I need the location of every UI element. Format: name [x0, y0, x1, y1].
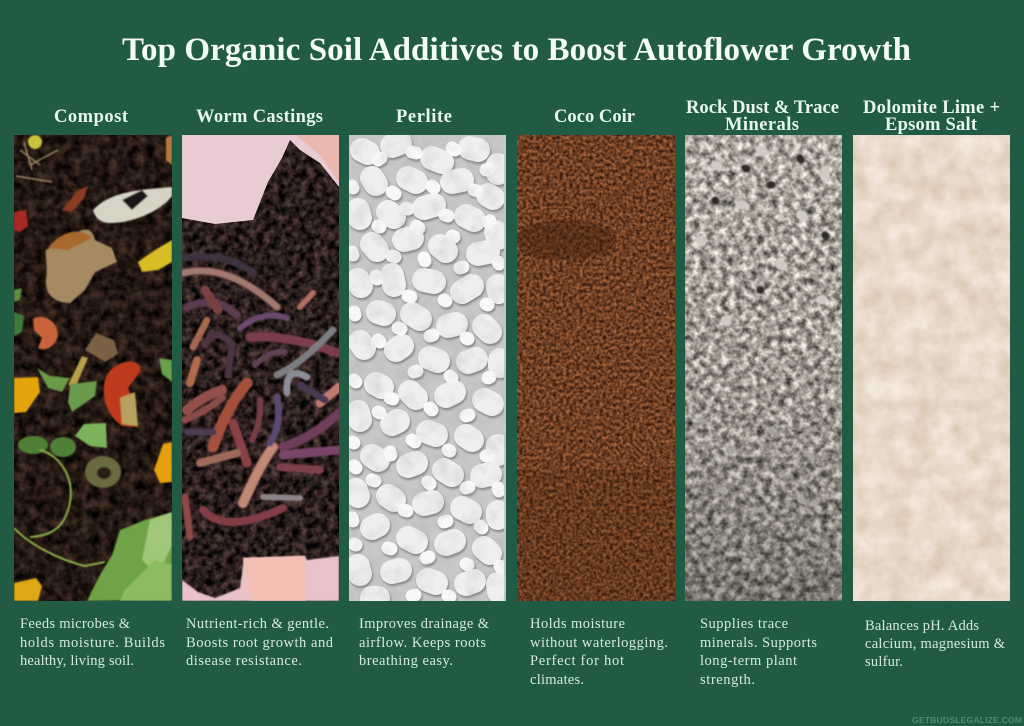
column: compost [14, 107, 172, 669]
heading: rock dust and trace minerals: Minerals [725, 115, 799, 135]
heading: dolomite lime and epsom salt [863, 98, 1000, 135]
photo: crushed rock dust [685, 135, 842, 601]
photo: worms in a hand [182, 135, 339, 601]
description: worm castings [186, 616, 334, 669]
title: Top Organic Soil Additives to Boost Autoflower Growth [122, 32, 911, 68]
heading: dolomite lime and epsom salt: Dolomite Lime + [863, 98, 1000, 118]
description: compost: Feeds microbes & [20, 616, 131, 632]
description: rock dust and trace minerals: long-term plant [700, 653, 797, 669]
photo: compost with food scraps [14, 135, 172, 601]
photo: pale lime powder [853, 135, 1010, 601]
description: coco coir: Holds moisture [530, 616, 625, 632]
description: coco coir: climates. [530, 672, 584, 688]
description: dolomite lime and epsom salt: sulfur. [865, 654, 903, 670]
description: worm castings: Boosts root growth and [186, 635, 334, 651]
description: worm castings: Nutrient-rich & gentle. [186, 616, 329, 632]
column: rock dust and trace minerals [685, 98, 842, 688]
description: perlite [359, 616, 490, 669]
description: compost [20, 616, 165, 669]
description: rock dust and trace minerals: strength. [700, 672, 755, 688]
column: coco coir [515, 107, 675, 688]
column: perlite [349, 107, 506, 669]
heading: dolomite lime and epsom salt: Epsom Salt [885, 115, 978, 135]
heading: compost: Compost [54, 107, 129, 127]
photo: white perlite granules [349, 135, 506, 601]
description: coco coir: Perfect for hot [530, 653, 624, 669]
heading: rock dust and trace minerals: Rock Dust & Trace [686, 98, 839, 118]
column: worm castings [182, 107, 339, 669]
description: rock dust and trace minerals: Supplies trace [700, 616, 788, 632]
description: compost: healthy, living soil. [20, 653, 134, 669]
watermark: GETBUDSLEGALIZE.COM [912, 715, 1022, 725]
description: perlite: airflow. Keeps roots [359, 635, 486, 651]
description: coco coir [530, 616, 668, 688]
description: dolomite lime and epsom salt: Balances pH. Adds [865, 618, 979, 634]
description: coco coir: without waterlogging. [530, 635, 668, 651]
description: worm castings: disease resistance. [186, 653, 302, 669]
description: dolomite lime and epsom salt: calcium, magnesium & [865, 636, 1006, 652]
heading: rock dust and trace minerals [686, 98, 839, 135]
description: compost: holds moisture. Builds [20, 635, 165, 651]
column: dolomite lime and epsom salt [853, 98, 1010, 670]
heading: worm castings: Worm Castings [196, 107, 323, 127]
description: rock dust and trace minerals: minerals. Supports [700, 635, 817, 651]
description: dolomite lime and epsom salt [865, 618, 1006, 670]
description: perlite: Improves drainage & [359, 616, 490, 632]
description: rock dust and trace minerals [700, 616, 817, 688]
photo: coco coir fibres [515, 135, 675, 601]
heading: coco coir: Coco Coir [554, 107, 635, 127]
description: perlite: breathing easy. [359, 653, 453, 669]
heading: perlite: Perlite [396, 107, 452, 127]
